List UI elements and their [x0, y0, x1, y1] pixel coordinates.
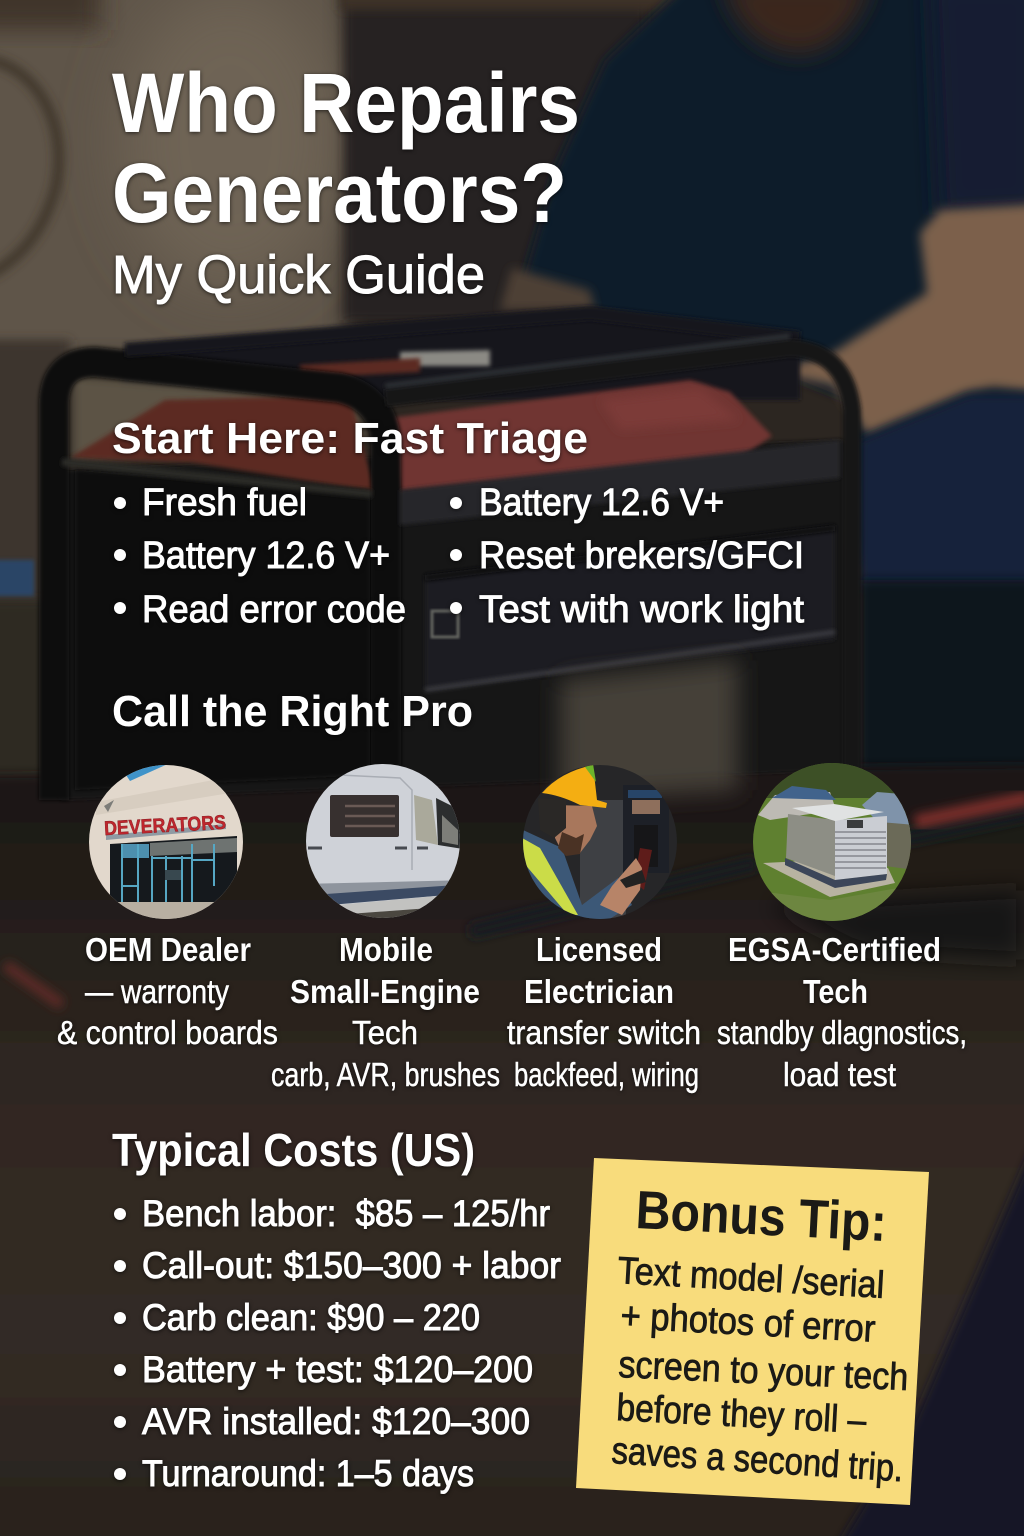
cost list: Turnaround: 1–5 days: [142, 1453, 474, 1494]
card label: mobile small-engine tech: carb, AVR, brushes: [271, 1056, 500, 1093]
card label: licensed electrician: Electrician: [524, 973, 674, 1010]
red tank: [70, 395, 375, 492]
title: Generators?: [112, 146, 567, 240]
card label: EGSA-certified tech: standby dlagnostics,: [717, 1014, 967, 1051]
generator frame: [54, 362, 386, 800]
workbench: [0, 765, 1024, 1536]
card label: OEM dealer: & control boards: [57, 1014, 278, 1051]
triage checklist: Fresh fuel: [142, 482, 307, 524]
card label: OEM dealer: OEM Dealer: [85, 931, 251, 968]
triage checklist: Read error code: [142, 589, 406, 631]
triage checklist: Battery 12.6 V+: [142, 535, 390, 577]
red tool handle left: [5, 965, 62, 1005]
red tool right: [915, 798, 1024, 822]
cost list: Carb clean: $90 – 220: [142, 1297, 480, 1338]
card label: licensed electrician: Licensed: [536, 931, 662, 968]
photo: standby generator on lawn: [750, 760, 915, 925]
cost list: Bench labor: $85 – 125/hr: [142, 1193, 550, 1234]
title: Who Repairs: [112, 56, 580, 150]
mechanic trousers: [860, 580, 1024, 800]
sign lettering: DEVERATORS: [104, 812, 227, 840]
generator enclosure: [786, 814, 835, 876]
mechanic torso: [520, 0, 1024, 620]
sticky body text: saves a second trip.: [610, 1430, 904, 1490]
hands and phone: [600, 858, 642, 915]
cost list: Battery + test: $120–200: [142, 1349, 533, 1390]
hard hat: [542, 765, 607, 808]
sticky body text: + photos of error: [620, 1295, 877, 1351]
card label: EGSA-certified tech: load test: [783, 1056, 896, 1093]
sticky body text: [610, 1250, 909, 1490]
photo: dealer storefront: [89, 765, 243, 919]
card label: mobile small-engine tech: [271, 931, 500, 1093]
triage checklist: Reset brekers/GFCI: [479, 535, 804, 577]
dark doorway: [345, 0, 645, 320]
worker body: [520, 830, 632, 925]
forearm left: [500, 268, 595, 310]
sticky body text: before they roll –: [616, 1387, 868, 1442]
dark bench rail: [470, 812, 1024, 932]
title: [112, 56, 580, 305]
generator rear shroud: [120, 312, 800, 400]
card label: mobile small-engine tech: Small-Engine: [290, 973, 480, 1010]
generator left vents: [75, 470, 370, 790]
slab: [763, 860, 895, 897]
mechanic arm: [770, 204, 1024, 434]
background wall: [0, 0, 345, 360]
card label: mobile small-engine tech: Tech: [352, 1014, 418, 1051]
card label: EGSA-certified tech: EGSA-Certified: [728, 931, 941, 968]
sticky heading: Bonus Tip:: [634, 1180, 888, 1253]
mechanic neck: [722, 0, 872, 54]
engine: [560, 660, 738, 800]
photo: white service van: [306, 764, 460, 918]
sticky note: bonus tip: [576, 1158, 929, 1505]
heading: call the right pro: Call the Right Pro: [112, 687, 473, 736]
triage checklist: Test with work light: [479, 589, 804, 631]
black tools on bench: [770, 890, 1024, 960]
control panel: [400, 440, 840, 525]
hi-vis vest: [522, 838, 578, 915]
generator body: [60, 440, 850, 800]
card label: OEM dealer: — warronty: [85, 973, 229, 1010]
card label: EGSA-certified tech: Tech: [803, 973, 868, 1010]
card label: licensed electrician: [507, 931, 701, 1093]
shirt below arm: [860, 395, 1024, 590]
card label: licensed electrician: transfer switch: [507, 1014, 701, 1051]
photo: electrician in hard hat: [523, 765, 677, 919]
wall hose loop: [0, 60, 59, 275]
triage checklist: [114, 482, 804, 631]
sticky body text: screen to your tech: [618, 1344, 909, 1399]
sticky body text: Text model /serial: [616, 1250, 885, 1307]
sign shadow: [106, 824, 226, 840]
heading: start here: Start Here: Fast Triage: [112, 414, 588, 463]
card label: licensed electrician: backfeed, wiring: [514, 1056, 699, 1093]
card label: OEM dealer: [57, 931, 278, 1051]
worker head: [555, 805, 597, 853]
blue wall stripe: [0, 560, 34, 596]
cost list: AVR installed: $120–300: [142, 1401, 530, 1442]
card label: mobile small-engine tech: Mobile: [339, 931, 433, 968]
triage checklist: Battery 12.6 V+: [479, 482, 724, 524]
card label: EGSA-certified tech: [717, 931, 967, 1093]
cost list: [114, 1193, 561, 1494]
title: My Quick Guide: [112, 245, 485, 305]
heading: typical costs: Typical Costs (US): [112, 1124, 475, 1176]
cost list: Call-out: $150–300 + labor: [142, 1245, 561, 1286]
